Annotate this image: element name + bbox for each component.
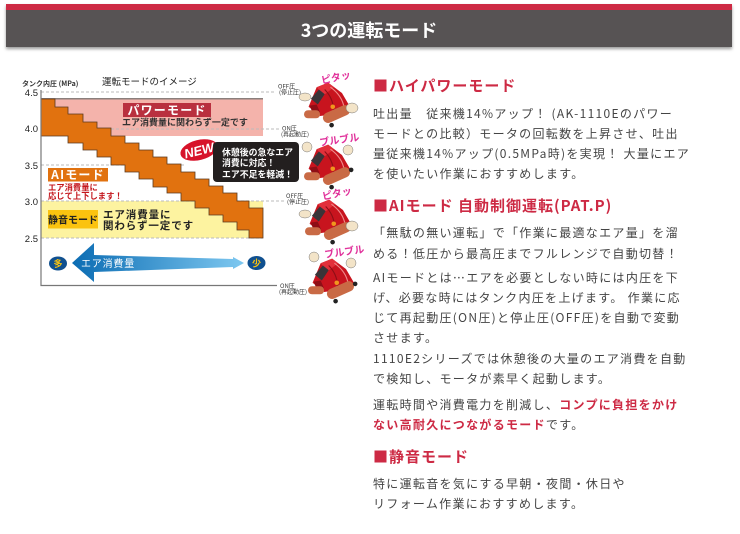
quiet mode band xyxy=(41,201,263,238)
off pressure label 2: OFF圧 xyxy=(286,191,303,200)
text: で検知し、モータが素早く起動します。 xyxy=(373,370,611,387)
quiet mode label: 関わらず一定です xyxy=(103,218,194,233)
off pressure label 1: (停止圧) xyxy=(279,88,301,96)
text: AIモードとは…エアを必要としない時には内圧を下 xyxy=(373,269,679,286)
on pressure label 1: (再起動圧) xyxy=(281,130,309,138)
AI mode label xyxy=(48,166,123,202)
power mode label: パワーモード xyxy=(127,102,207,118)
icon: compressor buruburu 2 xyxy=(308,241,365,303)
callout: new feature: 休憩後の急なエア xyxy=(222,146,293,158)
y axis labels xyxy=(25,88,38,245)
AI mode staircase xyxy=(41,99,263,238)
icon: compressor piTa 1: ピタッ xyxy=(320,66,352,87)
text: げ、必要な時にはタンク内圧を上げます。 作業に応 xyxy=(373,289,681,306)
badge: many xyxy=(49,256,67,270)
text block: AI mode description xyxy=(373,224,687,433)
AI mode label: 応じて上下します！ xyxy=(48,190,123,202)
header banner xyxy=(6,4,732,47)
text: 「無駄の無い運転」で「作業に最適なエア量」を溜 xyxy=(373,224,679,241)
heading: AI mode: ■AIモード 自動制御運転(PAT.P) xyxy=(373,195,612,216)
power mode label xyxy=(122,102,248,128)
y axis labels: 4.0 xyxy=(25,124,38,135)
icon: compressor piTa 2: ピタッ xyxy=(321,182,353,203)
text: 特に運転音を気にする早朝・夜間・休日や xyxy=(373,475,626,492)
off pressure label 2: (停止圧) xyxy=(287,197,309,206)
dashed guide lines xyxy=(41,92,284,238)
air consumption arrow: エア消費量 xyxy=(81,255,135,270)
off pressure label 1: OFF圧 xyxy=(278,82,295,90)
axes xyxy=(41,90,277,286)
AI mode label: エア消費量に xyxy=(48,182,98,194)
icon: compressor piTa 2 xyxy=(299,182,358,244)
callout: new feature: 消費に対応！ xyxy=(222,156,275,169)
icon: compressor buruburu 1 xyxy=(302,129,360,189)
y axis labels: 3.5 xyxy=(25,161,38,172)
quiet mode label xyxy=(48,207,194,233)
text: じて再起動圧(ON圧)と停止圧(OFF圧)を自動で変動 xyxy=(373,309,680,326)
off pressure label 2 xyxy=(286,191,309,206)
icon: compressor piTa 1 xyxy=(299,66,358,127)
icon: compressor buruburu 1: ブルブル xyxy=(318,129,360,149)
y axis labels: 2.5 xyxy=(25,234,38,245)
y axis labels: 3.0 xyxy=(25,197,38,208)
badge: few: 少 xyxy=(252,256,261,270)
y axis labels: 4.5 xyxy=(25,88,38,99)
on pressure label 2: (再起動圧) xyxy=(279,287,307,296)
text: 吐出量 従来機14%アップ！ (AK-1110Eのパワー xyxy=(373,105,673,122)
text: リフォーム作業におすすめします。 xyxy=(373,495,584,512)
text: 量従来機14%アップ(0.5MPa時)を実現！ 大量にエア xyxy=(373,145,690,162)
text: 運転時間や消費電力を削減し、コンプに負担をかけ xyxy=(373,396,679,413)
heading: high power mode: ■ハイパワーモード xyxy=(373,75,516,96)
text: させます。 xyxy=(373,329,438,346)
callout: new feature: エア不足を軽減！ xyxy=(222,168,293,180)
text: 1110E2シリーズでは休憩後の大量のエア消費を自動 xyxy=(373,350,687,367)
text: を使いたい作業におすすめします。 xyxy=(373,165,585,182)
text: める！低圧から最高圧までフルレンジで自動切替！ xyxy=(373,245,679,262)
heading: quiet mode: ■静音モード xyxy=(373,446,469,467)
text block: quiet mode description xyxy=(373,475,626,512)
title: 3つの運転モード xyxy=(301,17,437,43)
chart title: 運転モードのイメージ xyxy=(102,74,197,88)
badge: many: 多 xyxy=(53,257,63,270)
AI mode label: AIモード xyxy=(50,166,105,183)
icon: compressor buruburu 2: ブルブル xyxy=(323,241,365,261)
text: ない高耐久につながるモードです。 xyxy=(373,416,585,433)
power mode band xyxy=(41,98,263,136)
off pressure label 1 xyxy=(278,82,301,96)
on pressure label 2: ON圧 xyxy=(280,281,295,290)
text: モードとの比較）モータの回転数を上昇させ、吐出 xyxy=(373,125,679,142)
badge: few xyxy=(248,256,266,270)
power mode label: エア消費量に関わらず一定です xyxy=(122,116,248,128)
text block: high power description xyxy=(373,105,690,182)
chart: operating mode image xyxy=(22,66,365,304)
quiet mode label: エア消費量に xyxy=(103,207,171,222)
air consumption arrow xyxy=(72,243,244,282)
y axis title: タンク内圧 (MPa) xyxy=(22,79,79,89)
NEW badge: NEW xyxy=(183,139,217,161)
on pressure label 1: ON圧 xyxy=(282,124,297,132)
NEW badge xyxy=(178,136,220,164)
callout: new feature xyxy=(213,142,299,182)
on pressure label 2 xyxy=(279,281,307,296)
quiet mode label: 静音モード xyxy=(48,212,98,226)
on pressure label 1 xyxy=(281,124,309,138)
